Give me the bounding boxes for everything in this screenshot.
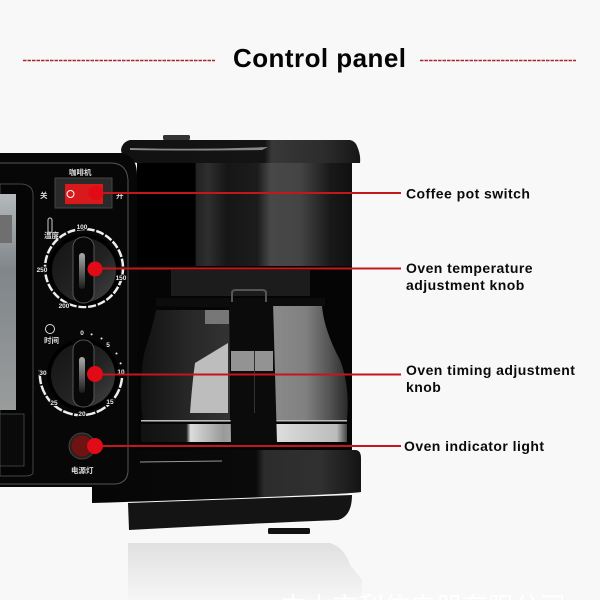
panel outline bbox=[0, 163, 128, 484]
coffee maker bbox=[92, 135, 361, 534]
temperature icon and label bbox=[44, 218, 59, 240]
callout: oven timing knob: knob bbox=[406, 379, 441, 395]
glass neck highlight bbox=[205, 310, 229, 324]
oven window frame bbox=[0, 184, 33, 476]
right dashed rule bbox=[420, 60, 576, 62]
timer dial: 30 bbox=[39, 370, 47, 377]
title text: Control panel bbox=[233, 43, 406, 73]
handle divider bbox=[254, 351, 255, 413]
oven panel bbox=[0, 153, 137, 487]
callout: oven temperature knob bbox=[88, 260, 533, 293]
foot bbox=[268, 528, 310, 534]
filter holder bbox=[171, 270, 310, 296]
callout: coffee pot switch: Coffee pot switch bbox=[406, 186, 530, 202]
base highlight bbox=[140, 461, 222, 462]
temperature dial: 250 bbox=[37, 267, 48, 274]
callout: oven indicator light: Oven indicator light bbox=[404, 438, 544, 454]
lid highlight bbox=[130, 147, 268, 150]
callout: coffee pot switch bbox=[88, 186, 530, 202]
timer dial: 5 bbox=[106, 342, 110, 349]
indicator light bbox=[69, 433, 95, 459]
red rocker bbox=[65, 184, 103, 204]
temperature icon and label: 温度 bbox=[44, 230, 59, 240]
handle window bbox=[231, 351, 273, 371]
callout: oven indicator light bbox=[87, 438, 544, 454]
glass carafe left bbox=[141, 310, 230, 422]
timer dial: 10 bbox=[117, 369, 125, 376]
lower housing bbox=[137, 266, 352, 456]
callout: oven temperature knob: Oven temperature bbox=[406, 260, 533, 276]
oven window glass bbox=[0, 194, 16, 410]
upper base bbox=[92, 450, 361, 503]
timer icon and label bbox=[44, 324, 59, 345]
timer dial: 15 bbox=[106, 399, 114, 406]
coffee label: 咖啡机 bbox=[69, 167, 92, 177]
carafe handle bbox=[229, 302, 277, 443]
temperature dial: 150 bbox=[116, 275, 127, 282]
carafe band bbox=[141, 424, 347, 442]
timer icon and label: 时间 bbox=[44, 335, 59, 345]
switch housing bbox=[55, 178, 112, 208]
oven bottom door bbox=[0, 414, 24, 466]
callout: oven temperature knob: adjustment knob bbox=[406, 277, 525, 293]
panel body bbox=[0, 153, 137, 487]
reservoir bbox=[137, 160, 352, 266]
callout: oven timing knob: Oven timing adjustment bbox=[406, 362, 575, 378]
carafe band edge bbox=[141, 420, 347, 422]
handle loop bbox=[232, 290, 266, 302]
carafe collar bbox=[156, 298, 325, 308]
switch on label: 开 bbox=[116, 191, 124, 200]
oven interior detail bbox=[0, 215, 12, 243]
timer dial bbox=[39, 330, 125, 418]
timer dial: 25 bbox=[50, 400, 58, 407]
temperature dial bbox=[37, 224, 127, 310]
timer dial: 0 bbox=[80, 330, 84, 337]
glass carafe right bbox=[272, 306, 348, 420]
glass reflection bbox=[190, 343, 228, 413]
callout: oven timing knob bbox=[87, 362, 575, 395]
lower base bbox=[128, 495, 352, 530]
timer dial: 20 bbox=[78, 411, 86, 418]
switch off label: 关 bbox=[40, 190, 48, 200]
temperature dial: 100 bbox=[77, 224, 88, 231]
indicator label: 电源灯 bbox=[71, 465, 94, 475]
temperature dial: 200 bbox=[59, 303, 70, 310]
reflection shadow bbox=[128, 543, 362, 600]
top button bbox=[163, 135, 190, 140]
lid bbox=[121, 140, 360, 163]
left dashed rule bbox=[23, 60, 215, 62]
